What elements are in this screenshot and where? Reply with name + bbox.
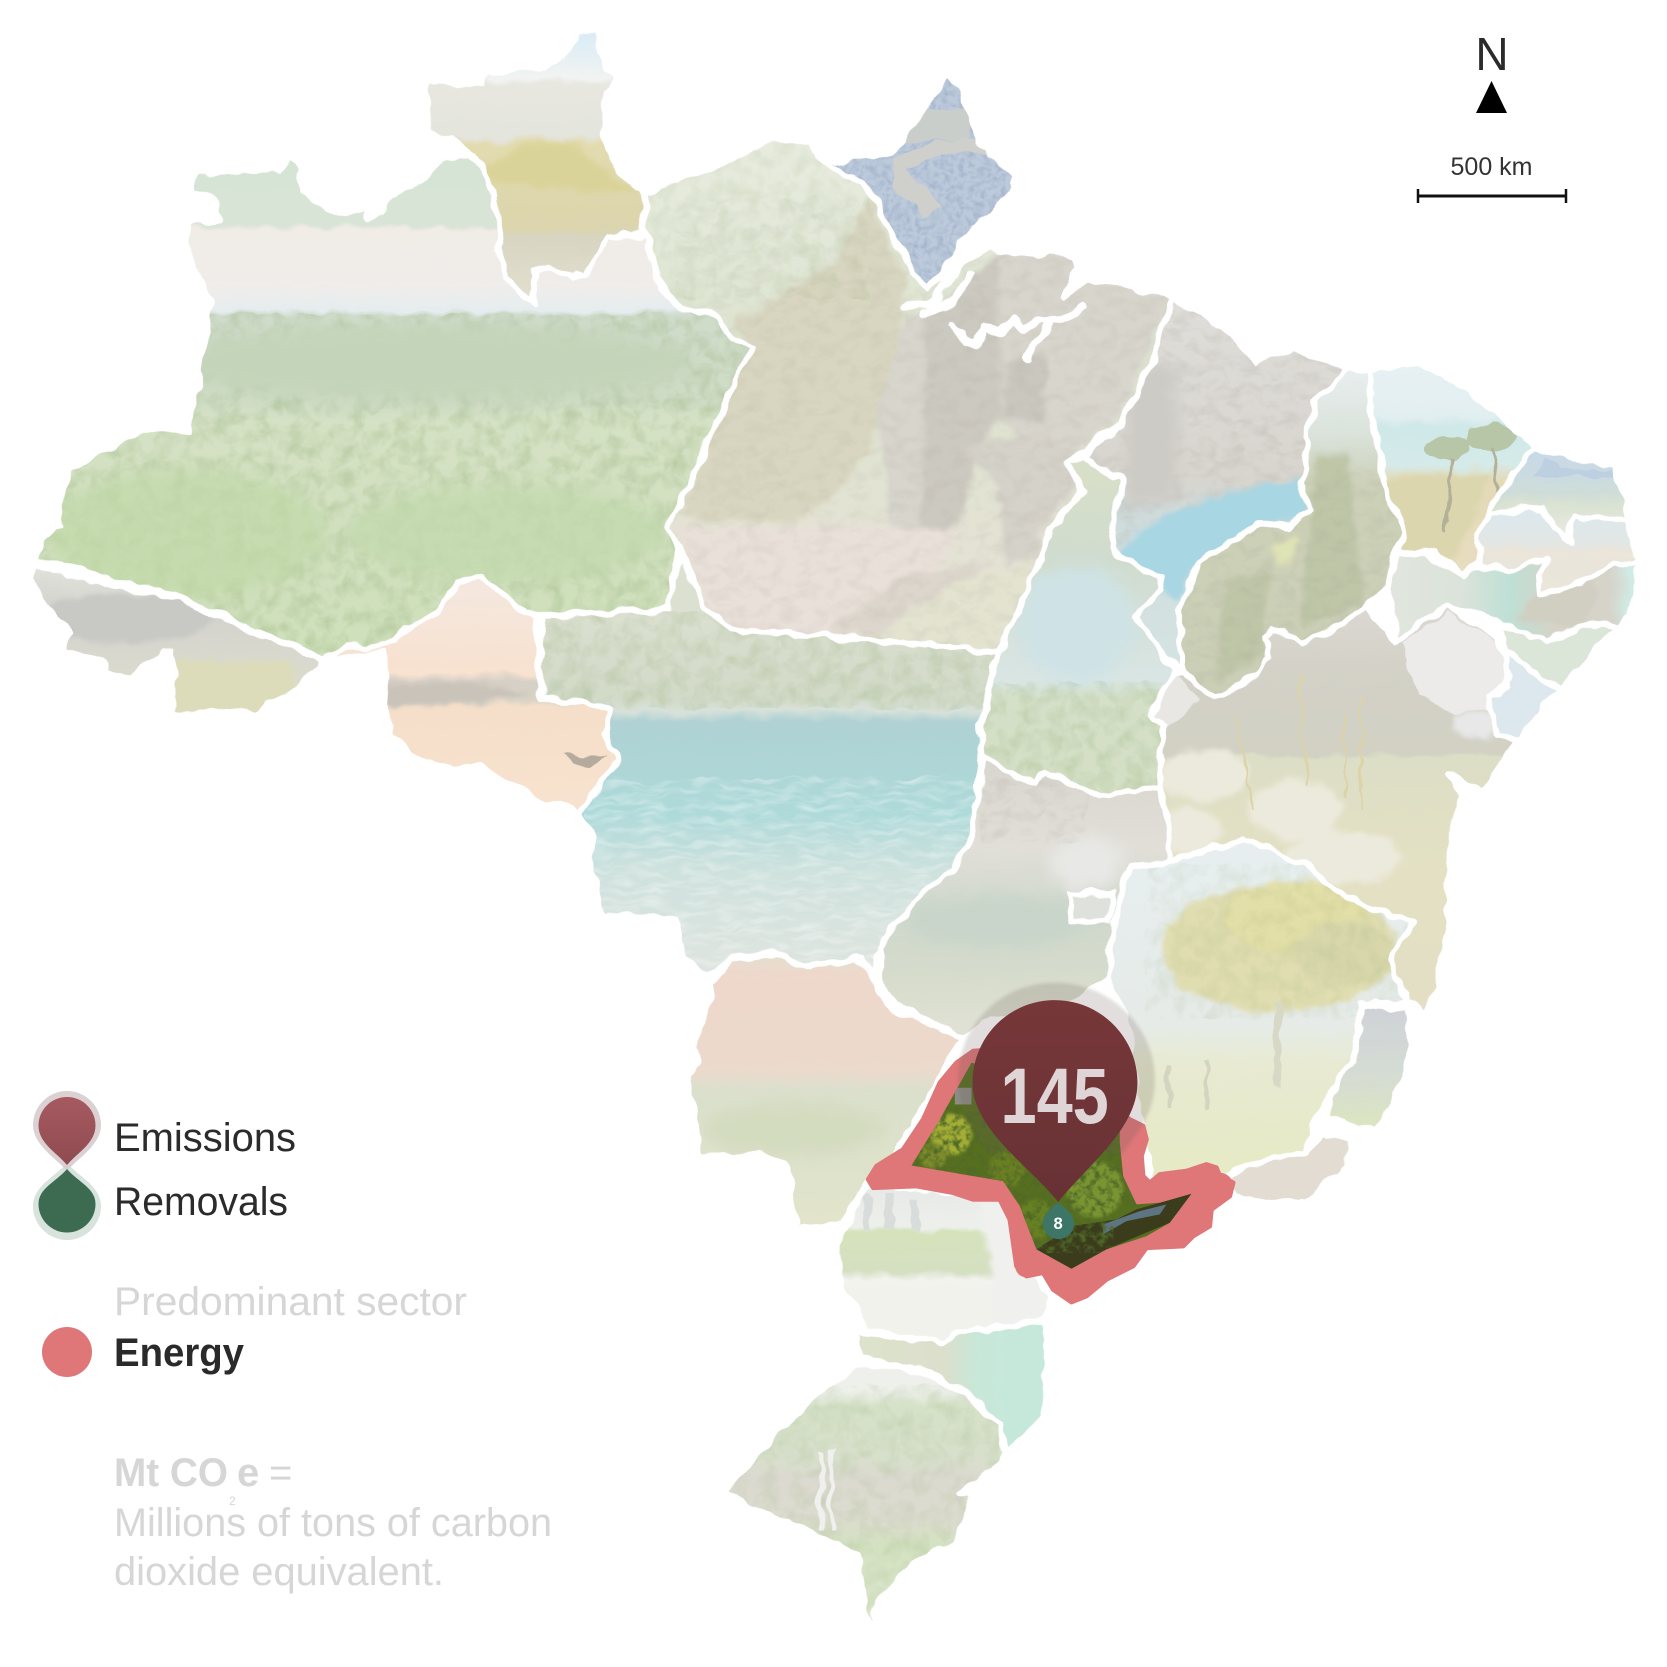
- state: Tocantins: [980, 458, 1174, 799]
- note: definition of Mt CO2e: Mt CO: [114, 1451, 228, 1495]
- state: Goias: [879, 757, 1169, 1039]
- emissions pin: value 145: 145: [1000, 1051, 1109, 1140]
- legend: emissions and removals: [33, 1091, 296, 1240]
- legend: predominant sector: [42, 1280, 467, 1377]
- Marajo island white channels: [905, 237, 1084, 359]
- scale bar: 500 km: 500 km: [1450, 153, 1532, 181]
- note: definition of Mt CO2e: Millions of tons of carbon: [114, 1501, 552, 1545]
- label: Energy: Energy: [114, 1331, 245, 1375]
- label: Removals: Removals: [114, 1180, 288, 1224]
- state: Rio Grande do Norte: [1491, 451, 1625, 534]
- emissions pin: value 145: [972, 1000, 1137, 1202]
- icon: emissions drop halo: [33, 1091, 101, 1171]
- Sao Paulo energy sector outline: [868, 1046, 1233, 1302]
- note: definition of Mt CO2e: 2: [229, 1494, 236, 1508]
- note: definition of Mt CO2e: e: [237, 1451, 259, 1495]
- state: Minas Gerais, tree and grass: [1108, 839, 1412, 1178]
- note: definition of Mt CO2e: [114, 1451, 552, 1594]
- state: Amapa, acai berries: [832, 78, 1012, 284]
- Federal District outline: [1071, 892, 1111, 921]
- state: Sergipe: [1488, 648, 1560, 741]
- removals pin: value 8: [1043, 1202, 1074, 1239]
- state: Parana, waterfall: [839, 1189, 1048, 1341]
- icon: removals drop halo: [33, 1163, 101, 1240]
- state: Rio de Janeiro: [1223, 1132, 1349, 1204]
- state: Mato Grosso do Sul, red cliff: [689, 953, 965, 1230]
- state: Amazonas, forest and river photo: [27, 156, 773, 666]
- state: Espirito Santo: [1327, 1004, 1412, 1132]
- north arrow: [1475, 28, 1509, 113]
- state: Ceara, palm beach: [1370, 364, 1534, 573]
- state: Bahia, savanna and flowers: [1151, 605, 1517, 1013]
- state: Paraiba: [1477, 508, 1638, 594]
- label: Predominant sector: Predominant sector: [114, 1280, 467, 1324]
- state: Santa Catarina, turquoise water: [859, 1321, 1048, 1454]
- Sao Paulo forest photo: [907, 1063, 1191, 1269]
- removals pin: value 8: 8: [1054, 1214, 1063, 1233]
- state: Roraima, tepui photo: [426, 29, 645, 304]
- state: Acre: [29, 565, 322, 714]
- state: Para, tree buttress photo: [645, 139, 1172, 653]
- highlighted state: Sao Paulo: [868, 983, 1233, 1302]
- icon: emissions drop: [38, 1097, 96, 1165]
- note: definition of Mt CO2e: dioxide equivalent.: [114, 1550, 444, 1594]
- state: Maranhao, stone cliff and blue water: [1090, 302, 1342, 664]
- note: definition of Mt CO2e: =: [269, 1451, 292, 1495]
- state: Rondonia, sunset lake: [325, 578, 618, 813]
- north arrow: N: [1475, 28, 1509, 80]
- icon: removals drop: [38, 1169, 96, 1232]
- state: Mato Grosso, turquoise river: [538, 554, 1002, 977]
- state: Alagoas: [1503, 624, 1616, 690]
- label: Emissions: Emissions: [114, 1116, 296, 1160]
- state: Pernambuco: [1390, 552, 1638, 642]
- state: Piaui, cactus photo: [1172, 367, 1412, 698]
- icon: energy colour dot: [42, 1327, 92, 1377]
- state: Rio Grande do Sul, canyon waterfall: [728, 1367, 1002, 1622]
- emissions pin halo: [958, 983, 1155, 1153]
